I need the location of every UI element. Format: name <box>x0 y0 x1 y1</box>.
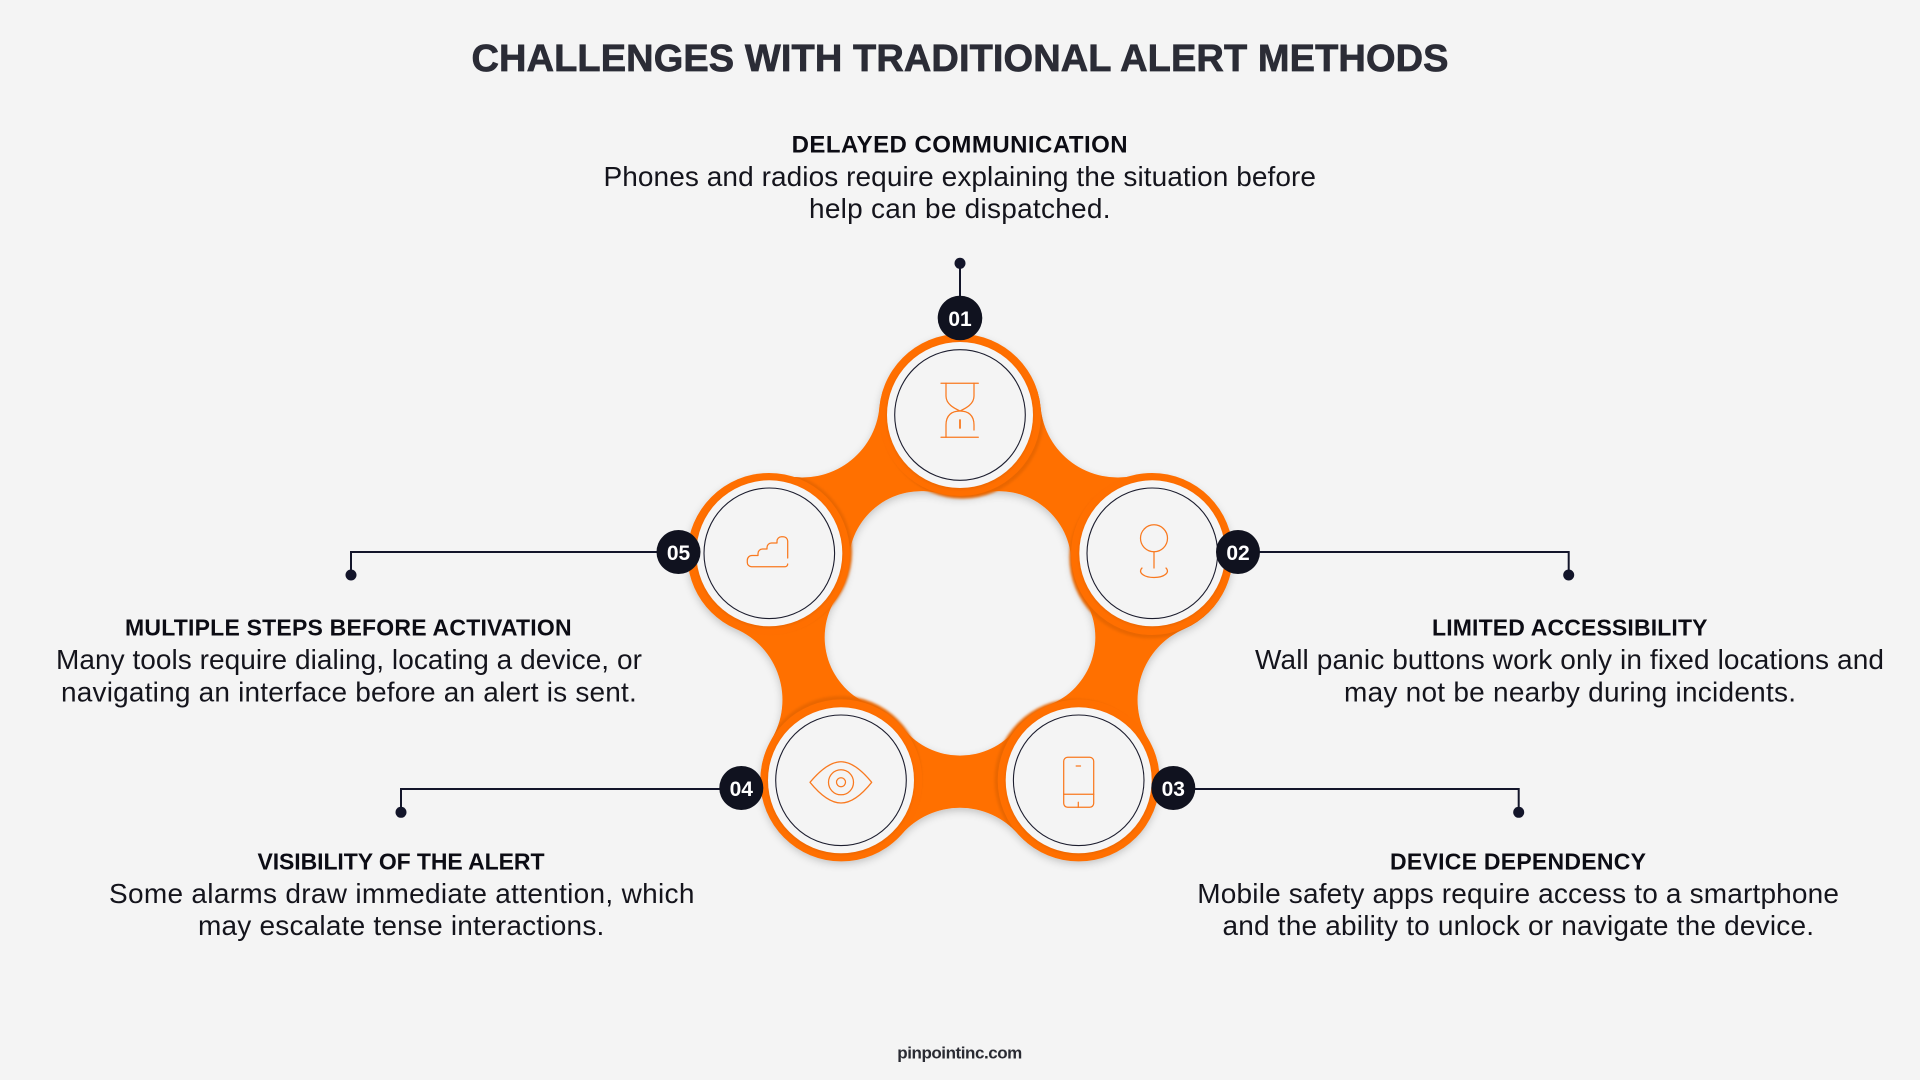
text: device dependency <box>1197 849 1839 941</box>
badge 03 <box>1151 766 1195 810</box>
circle 01 <box>879 334 1044 498</box>
circle 05 <box>688 471 852 635</box>
step 02: limited accessibility <box>1069 473 1884 708</box>
connector 03 <box>1175 789 1524 818</box>
text: limited accessibility: Wall panic buttons work only in fixed locations and <box>1255 644 1884 675</box>
step 03: device dependency <box>994 699 1839 941</box>
connector 01 <box>954 258 966 300</box>
circle 02 <box>1069 473 1233 638</box>
text: visibility of the alert: may escalate tense interactions. <box>198 910 604 941</box>
icon: smartphone <box>1064 757 1094 807</box>
footer url: pinpointinc.com <box>897 1044 1022 1063</box>
icon: stairs <box>747 537 788 567</box>
circle 04 <box>760 696 922 861</box>
step 05: multiple steps before activation <box>56 471 852 708</box>
text: multiple steps before activation: Many tools require dialing, locating a device, or <box>56 644 642 675</box>
text: multiple steps before activation: MULTIPLE STEPS BEFORE ACTIVATION <box>125 615 572 641</box>
badge 04 <box>719 766 763 810</box>
text: visibility of the alert: VISIBILITY OF THE ALERT <box>258 849 544 875</box>
text: delayed communication <box>604 132 1316 224</box>
text: visibility of the alert <box>109 849 694 941</box>
connector 05 <box>346 552 680 580</box>
text: multiple steps before activation: navigating an interface before an alert is sent. <box>61 677 637 708</box>
step 01: delayed communication <box>604 132 1316 498</box>
badge 01 <box>938 296 982 340</box>
step 04: visibility of the alert <box>109 696 922 941</box>
badge 03: 03 <box>1162 778 1185 801</box>
badge 05: 05 <box>667 542 690 565</box>
connector 02 <box>1240 552 1574 580</box>
badge 02: 02 <box>1226 542 1250 565</box>
text: device dependency: DEVICE DEPENDENCY <box>1390 849 1646 875</box>
icon: location pin <box>1140 525 1168 577</box>
text: delayed communication: help can be dispatched. <box>809 193 1110 224</box>
connector 04 <box>396 789 742 818</box>
text: visibility of the alert: Some alarms draw immediate attention, which <box>109 878 694 909</box>
text: limited accessibility: LIMITED ACCESSIBILITY <box>1432 615 1708 641</box>
text: limited accessibility: may not be nearby during incidents. <box>1344 677 1796 708</box>
badge 02 <box>1216 530 1260 574</box>
text: device dependency: Mobile safety apps require access to a smartphone <box>1197 878 1839 909</box>
text: delayed communication: Phones and radios require explaining the situation before <box>604 161 1316 192</box>
text: device dependency: and the ability to unlock or navigate the device. <box>1222 910 1814 941</box>
badge 01: 01 <box>948 308 972 331</box>
orange ring connector <box>687 334 1233 861</box>
title: CHALLENGES WITH TRADITIONAL ALERT METHODS <box>472 38 1448 80</box>
text: multiple steps before activation <box>56 615 642 708</box>
icon: hourglass <box>941 383 978 437</box>
text: delayed communication: DELAYED COMMUNICATION <box>792 132 1128 159</box>
badge 04: 04 <box>730 778 753 801</box>
text: limited accessibility <box>1255 615 1884 708</box>
circle 03 <box>994 699 1160 861</box>
badge 05 <box>656 530 700 574</box>
icon: eye <box>810 762 872 803</box>
